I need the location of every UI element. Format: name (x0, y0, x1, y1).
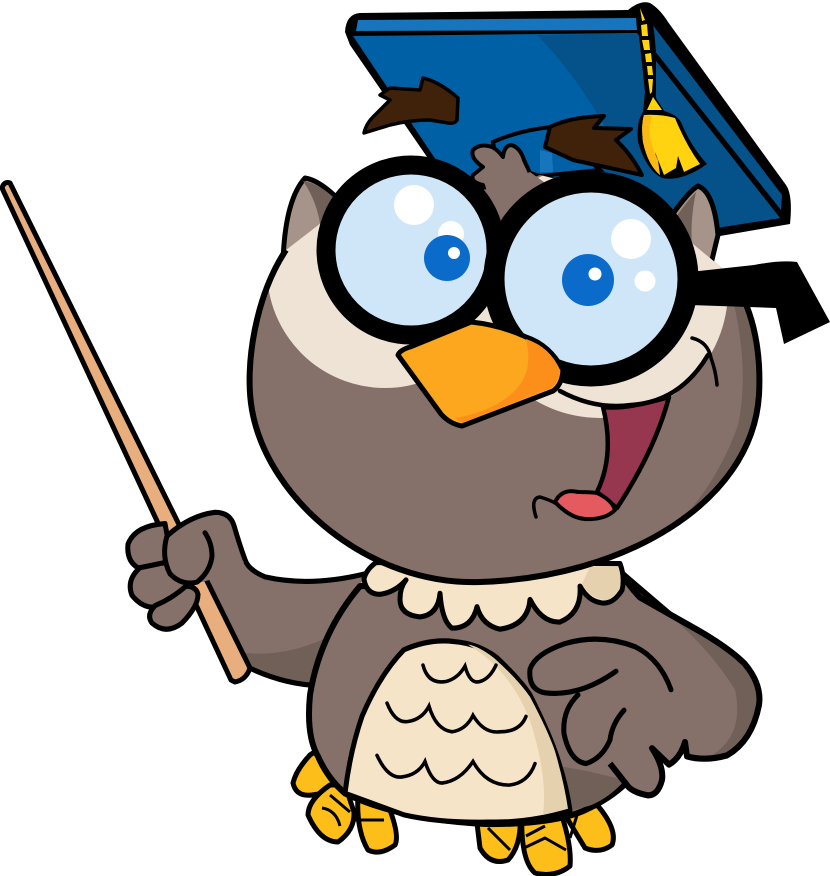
icon: owl foot left (293, 745, 396, 852)
body lower shade (563, 767, 625, 811)
glasses temple arm (690, 261, 830, 344)
cap shaded panel (537, 33, 780, 228)
back of hand (166, 512, 245, 583)
fingers (128, 524, 198, 629)
icon: ear right (672, 186, 718, 268)
cap base band (493, 127, 600, 180)
owl head (250, 152, 775, 582)
owl body (309, 572, 680, 824)
cheek line (692, 338, 717, 385)
forehead between lenses (485, 172, 548, 245)
icon: owl foot right (476, 800, 613, 874)
hand gripping pointer (128, 512, 245, 629)
mouth interior (597, 397, 669, 508)
right eye (562, 219, 656, 306)
head right shade (690, 306, 756, 510)
wing: right (530, 572, 759, 795)
arm holding pointer (200, 541, 365, 687)
eyebrow: left (364, 78, 458, 133)
lower lip line (534, 497, 555, 517)
beak (398, 322, 563, 426)
right lens (494, 182, 688, 376)
belly feathers (377, 665, 535, 785)
icon: ear left (283, 178, 335, 262)
icon: pointer stick (2, 183, 250, 682)
smile line (560, 355, 708, 406)
left lens (326, 165, 496, 335)
head fill (250, 175, 759, 582)
tongue (555, 491, 615, 519)
mouth (534, 338, 717, 519)
cap outline (345, 2, 791, 250)
body fill (309, 572, 680, 824)
left eye (394, 185, 470, 281)
belly shade (468, 645, 568, 815)
hand outline (165, 512, 245, 583)
head outline (250, 250, 759, 582)
collar (364, 563, 623, 629)
cap side strip (652, 24, 782, 210)
head tuft (472, 145, 555, 235)
belly (345, 641, 570, 822)
glasses (326, 165, 830, 376)
eyebrow: right (545, 116, 642, 175)
cap front panel (353, 33, 780, 240)
graduation cap (345, 2, 791, 250)
cap top band (356, 18, 637, 31)
face cream patches (267, 152, 728, 418)
icon: tassel (636, 4, 707, 179)
